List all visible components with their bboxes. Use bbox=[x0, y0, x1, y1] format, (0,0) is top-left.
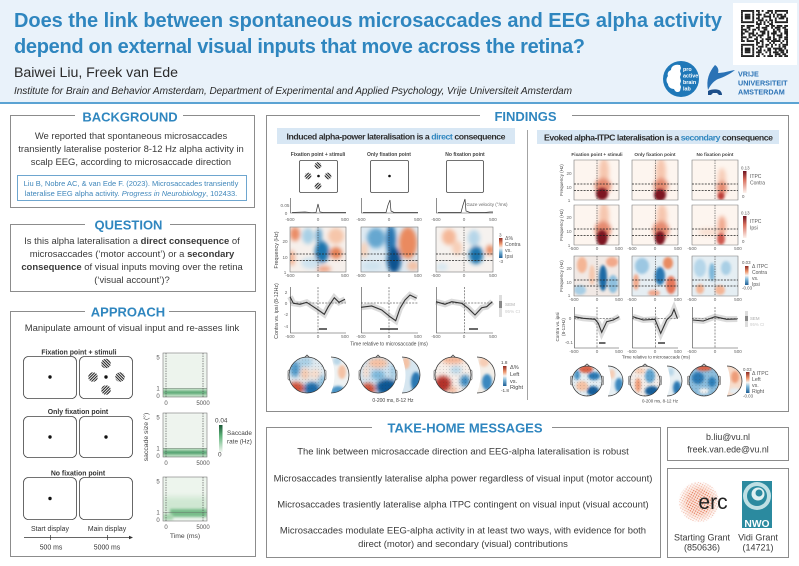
gaze velocity plots bbox=[281, 198, 508, 222]
task: no fixation point: No fixation point bbox=[51, 470, 106, 478]
ITPC lateralisation time-course: SEM bbox=[750, 316, 760, 321]
subheading: evoked alpha ITPC: Evoked alpha-ITPC lateralisation is a secondary consequence bbox=[544, 132, 773, 142]
ITPC contra heatmaps: 10 bbox=[566, 185, 572, 190]
grant labels: Vidi Grant bbox=[738, 532, 778, 542]
saccade heatmap: no fixation: 0 bbox=[164, 525, 168, 531]
question text: microsaccades (‘motor account’) or a secondary bbox=[30, 249, 235, 260]
saccade heatmap: no fixation bbox=[156, 477, 210, 531]
power colour bar: vs. bbox=[505, 248, 512, 254]
ITPC colour bars: -0.03 bbox=[742, 286, 753, 290]
lateralisation time-course: left: 0 bbox=[463, 334, 466, 339]
ITPC lateralisation time-course: 0 bbox=[654, 349, 657, 354]
ITPC topography: no fixation bbox=[688, 364, 743, 396]
ITPC topography: fixation + stimuli bbox=[570, 364, 624, 396]
saccade heatmap: no fixation: 5000 bbox=[196, 525, 210, 531]
lateralisation time-course: left: 0 bbox=[317, 334, 320, 339]
panel: contact: freek.van.ede@vu.nl bbox=[687, 444, 769, 454]
ITPC topography colour bar bbox=[743, 367, 769, 398]
ITPC lateralisation time-course: 500 bbox=[674, 349, 682, 354]
power heatmap: fixation + stimuli bbox=[282, 227, 346, 275]
saccade heatmap: fixation + stimuli: 5 bbox=[156, 356, 160, 362]
ITPC topography colour bar: vs. bbox=[752, 383, 759, 389]
ITPC colour bars: 0.13 bbox=[741, 210, 750, 216]
heading: take-home messages: TAKE-HOME MESSAGES bbox=[387, 420, 543, 436]
condition labels right: Fixation point + stimuli bbox=[571, 152, 623, 157]
message 3: Microsaccades trasiently lateralise alpha ITPC contingent on visual input (visual account) bbox=[277, 500, 649, 510]
question text: Is this alpha lateralisation a direct consequence of bbox=[24, 236, 240, 247]
topographies: left: 0-200 ms, 8-12 Hz bbox=[372, 398, 414, 404]
logo: VU text: AMSTERDAM bbox=[738, 88, 785, 96]
ITPC lateralisation time-course: (8-12Hz) bbox=[561, 318, 566, 336]
power x tick labels and axis: 0 bbox=[388, 273, 391, 278]
logo: VU text: UNIVERSITEIT bbox=[738, 78, 788, 88]
message 1: The link between microsaccade direction and EEG-alpha lateralisation is robust bbox=[297, 446, 629, 458]
timeline bbox=[24, 526, 133, 552]
ITPC difference heatmaps: 1 bbox=[568, 293, 571, 298]
ITPC ipsi heatmaps bbox=[559, 164, 742, 251]
power colour bar: Δ% bbox=[505, 236, 513, 242]
ITPC colour bars: ITPC bbox=[750, 219, 762, 225]
lateralisation time-course: left: 0 bbox=[388, 334, 391, 339]
ITPC difference heatmaps: 500 bbox=[734, 297, 742, 302]
topography colour bar left: 1.8 bbox=[501, 360, 508, 365]
power x tick labels and axis: -500 bbox=[285, 273, 295, 278]
ITPC ipsi heatmaps: -500 bbox=[627, 246, 637, 251]
lateralisation time-course: left: 0 bbox=[285, 301, 288, 306]
task: no fixation point bbox=[24, 470, 132, 520]
ITPC ipsi heatmaps: 500 bbox=[615, 246, 623, 251]
background text: We reported that spontaneous microsaccades bbox=[35, 131, 227, 142]
ITPC colour bars: Ipsi bbox=[752, 282, 760, 288]
citation: Liu B, Nobre AC, & van Ede F. (2023). Microsaccades transiently bbox=[24, 179, 239, 188]
saccade heatmap: only fixation: 5000 bbox=[196, 461, 210, 467]
ITPC contra heatmaps: 1 bbox=[568, 198, 571, 203]
power x tick labels and axis: -500 bbox=[356, 273, 366, 278]
ITPC difference heatmaps: Frequency (Hz) bbox=[559, 260, 564, 292]
heading: findings: FINDINGS bbox=[494, 109, 557, 124]
message 2: Microsaccades transiently lateralise alpha power regardless of visual input (motor account) bbox=[274, 474, 652, 484]
task: fixation point + stimuli: Fixation point + stimuli bbox=[41, 350, 117, 356]
ITPC ipsi heatmaps: 1 bbox=[568, 243, 571, 248]
ITPC colour bars: vs. bbox=[752, 276, 758, 282]
ITPC lateralisation time-course bbox=[555, 307, 764, 360]
logo: ERC: erc bbox=[698, 491, 728, 514]
ITPC ipsi heatmaps: Frequency (Hz) bbox=[559, 164, 564, 196]
title: Does the link between spontaneous microsaccades and EEG alpha activity bbox=[14, 10, 723, 32]
power heatmap: fixation + stimuli: 10 bbox=[282, 255, 288, 260]
power x tick labels and axis: 500 bbox=[341, 273, 349, 278]
ITPC lateralisation time-course: -500 bbox=[687, 349, 697, 354]
saccade axis labels bbox=[142, 413, 200, 540]
lateralisation time-course: left: -500 bbox=[356, 334, 366, 339]
power colour bar: -3 bbox=[499, 259, 504, 264]
power x tick labels and axis: Frequency (Hz) bbox=[274, 231, 280, 269]
stimulus screens left bbox=[300, 160, 484, 192]
lateralisation time-course: left: 500 bbox=[341, 334, 349, 339]
gaze velocity plots: -500 bbox=[285, 217, 295, 222]
saccade heatmap: only fixation: 1 bbox=[156, 446, 160, 452]
lateralisation time-course: left bbox=[274, 283, 520, 348]
ITPC ipsi heatmaps: 500 bbox=[734, 246, 742, 251]
heading: approach: APPROACH bbox=[91, 304, 165, 320]
condition labels left: Only fixation point bbox=[367, 152, 411, 158]
ITPC difference heatmaps: -500 bbox=[627, 297, 637, 302]
topography colour bar left: Left bbox=[510, 372, 520, 378]
power x tick labels and axis: 0 bbox=[317, 273, 320, 278]
power x tick labels and axis bbox=[274, 231, 497, 278]
ITPC ipsi heatmaps: 10 bbox=[566, 229, 572, 234]
gaze velocity plots: 500 bbox=[489, 217, 497, 222]
timeline: Start display bbox=[31, 526, 70, 533]
gaze velocity plots: 500 bbox=[341, 217, 349, 222]
ITPC colour bars: Contra bbox=[752, 270, 767, 276]
citation: lateralise EEG alpha activity. Progress in Neurobiology, 102433. bbox=[25, 189, 237, 198]
logo: proactive brain lab: lab bbox=[683, 86, 691, 92]
panel: contact: b.liu@vu.nl bbox=[706, 432, 750, 442]
gaze velocity plots: 0 bbox=[463, 217, 466, 222]
ITPC ipsi heatmaps: 0 bbox=[714, 246, 717, 251]
lateralisation time-course: left: -2 bbox=[284, 312, 288, 317]
background text: transiently lateralise posterior 8-12 Hz alpha activity in bbox=[18, 144, 244, 155]
saccade axis labels: Time (ms) bbox=[170, 533, 200, 540]
saccade colour bar: Saccade bbox=[227, 430, 252, 437]
saccade colour bar: 0 bbox=[218, 452, 222, 458]
gaze velocity plots: 500 bbox=[414, 217, 422, 222]
lateralisation time-course: left: -500 bbox=[431, 334, 441, 339]
topography colour bar left: Right bbox=[510, 385, 524, 391]
gaze velocity plots: 0.05 bbox=[281, 203, 290, 208]
panel: findings bbox=[266, 108, 788, 412]
saccade heatmap: fixation + stimuli: 0 bbox=[164, 401, 168, 407]
affiliation: Institute for Brain and Behavior Amsterdam, Department of Experimental and Applied Psychology, Vrije Universiteit Amsterdam bbox=[14, 86, 572, 97]
ITPC ipsi heatmaps: 0 bbox=[654, 246, 657, 251]
timeline: 500 ms bbox=[40, 544, 63, 552]
ITPC topography colour bar: Δ ITPC bbox=[752, 371, 769, 377]
ITPC colour bars: Δ ITPC bbox=[752, 264, 768, 270]
message 4: Microsaccades modulate EEG-alpha activity in at least two ways, with evidence for both bbox=[280, 526, 646, 536]
ITPC colour bars: 0 bbox=[742, 239, 745, 244]
panel: question bbox=[10, 218, 256, 292]
ITPC ipsi heatmaps: 500 bbox=[674, 246, 682, 251]
timeline: Main display bbox=[88, 526, 127, 533]
ITPC difference heatmaps: -500 bbox=[569, 297, 579, 302]
saccade heatmap: only fixation: 5 bbox=[156, 416, 160, 422]
topography: only fixation bbox=[359, 355, 421, 395]
message 4: direct (motor) and secondary (visual) contributions bbox=[358, 539, 568, 550]
ITPC topography colour bar: 0.03 bbox=[743, 367, 752, 372]
saccade colour bar bbox=[215, 418, 252, 458]
saccade heatmap: only fixation bbox=[156, 413, 210, 467]
task: only fixation point: Only fixation point bbox=[48, 409, 109, 416]
question text bbox=[21, 236, 243, 286]
citation bbox=[18, 176, 246, 200]
lateralisation time-course: left: -4 bbox=[284, 324, 288, 329]
saccade heatmap: fixation + stimuli bbox=[156, 353, 210, 407]
saccade axis labels: saccade size (°) bbox=[142, 413, 150, 461]
ITPC ipsi heatmaps: Frequency (Hz) bbox=[559, 209, 564, 241]
lateralisation time-course: left: 500 bbox=[489, 334, 497, 339]
header band bbox=[0, 0, 799, 104]
logo: griffin bbox=[707, 65, 735, 95]
saccade heatmap: fixation + stimuli: 1 bbox=[156, 386, 160, 392]
power colour bar: 3 bbox=[499, 232, 502, 238]
power heatmap: only fixation bbox=[360, 225, 419, 273]
saccade heatmap: only fixation: 0 bbox=[156, 454, 160, 460]
topography: fixation + stimuli bbox=[288, 355, 349, 396]
power x tick labels and axis: 500 bbox=[489, 273, 497, 278]
condition labels right: No fixation point bbox=[697, 152, 734, 157]
timeline: 5000 ms bbox=[94, 544, 121, 552]
gaze velocity plots: Gaze velocity (°/ms) bbox=[466, 202, 508, 207]
panel: funding bbox=[668, 468, 788, 558]
ITPC difference heatmaps: -500 bbox=[687, 297, 697, 302]
subheading: induced alpha power bbox=[277, 128, 515, 144]
gaze velocity plots: -500 bbox=[356, 217, 366, 222]
ITPC contra heatmaps: 20 bbox=[566, 171, 572, 176]
ITPC lateralisation time-course: 500 bbox=[615, 349, 623, 354]
saccade colour bar: 0.04 bbox=[215, 418, 228, 424]
topography: no fixation bbox=[434, 355, 495, 394]
condition labels left: Fixation point + stimuli bbox=[291, 152, 346, 158]
topographies: left bbox=[288, 355, 495, 404]
panel: approach bbox=[10, 304, 256, 556]
ITPC difference heatmaps: 20 bbox=[566, 266, 572, 271]
ITPC topography colour bar: -0.03 bbox=[743, 394, 754, 398]
QR code bbox=[733, 3, 797, 65]
lateralisation time-course: left: Contra vs. ipsi (8-12Hz) bbox=[274, 283, 280, 339]
ITPC contra heatmaps bbox=[566, 158, 738, 203]
logo: proactive brain lab bbox=[663, 61, 699, 97]
topography colour bar left: -1.8 bbox=[501, 388, 509, 393]
ITPC ipsi heatmaps: -500 bbox=[569, 246, 579, 251]
saccade colour bar: rate (Hz) bbox=[227, 438, 252, 446]
ITPC colour bars bbox=[741, 166, 768, 290]
logo: proactive brain lab: active bbox=[683, 74, 698, 80]
title bbox=[14, 10, 723, 58]
saccade heatmap: fixation + stimuli: 0 bbox=[156, 394, 160, 400]
logo: VU text: VRIJE bbox=[738, 70, 759, 78]
task: fixation point + stimuli bbox=[24, 350, 132, 398]
ITPC difference heatmaps bbox=[559, 256, 742, 302]
condition labels left: No fixation point bbox=[445, 152, 485, 158]
topographies: right: 0-200 ms, 8-12 Hz bbox=[642, 398, 678, 404]
heading: question: QUESTION bbox=[95, 218, 162, 232]
saccade heatmap: no fixation: 5 bbox=[156, 480, 160, 486]
lateralisation time-course: left: 2 bbox=[285, 290, 288, 295]
ITPC difference heatmaps: 0 bbox=[654, 297, 657, 302]
subheading: evoked alpha ITPC bbox=[537, 130, 779, 144]
ITPC ipsi heatmaps: 0 bbox=[596, 246, 599, 251]
ITPC topography: only fixation bbox=[628, 364, 683, 396]
background text bbox=[18, 131, 244, 168]
power x tick labels and axis: 0 bbox=[463, 273, 466, 278]
power colour bar bbox=[499, 232, 521, 264]
power heatmap: fixation + stimuli: 20 bbox=[282, 239, 288, 244]
power colour bar: Ipsi bbox=[505, 254, 513, 260]
power x tick labels and axis: 500 bbox=[414, 273, 422, 278]
ITPC ipsi heatmaps: -500 bbox=[687, 246, 697, 251]
logo: proactive brain lab: brain bbox=[683, 80, 696, 86]
ITPC lateralisation time-course: 95% CI bbox=[750, 322, 764, 327]
authors: Baiwei Liu, Freek van Ede bbox=[14, 65, 178, 81]
ITPC difference heatmaps: 500 bbox=[674, 297, 682, 302]
lateralisation time-course: left: 95% CI bbox=[505, 309, 520, 314]
saccade heatmap: only fixation: 0 bbox=[164, 461, 168, 467]
lateralisation time-course: left: 500 bbox=[414, 334, 422, 339]
gaze velocity plots: -500 bbox=[431, 217, 441, 222]
panel: contact bbox=[668, 428, 788, 460]
ITPC topography colour bar: Left bbox=[752, 377, 761, 383]
grant labels: (850636) bbox=[684, 542, 720, 552]
ITPC lateralisation time-course: -500 bbox=[569, 349, 579, 354]
ITPC lateralisation time-course: Time relative to microsaccade (ms) bbox=[622, 354, 691, 360]
background text: scalp EEG, according to microsaccade direction bbox=[31, 157, 231, 168]
logo: NWO: NWO bbox=[744, 519, 770, 530]
ITPC colour bars: ITPC bbox=[750, 174, 762, 180]
heading: background: BACKGROUND bbox=[82, 110, 178, 124]
ITPC lateralisation time-course: 0 bbox=[714, 349, 717, 354]
ITPC lateralisation time-course: Contra vs. ipsi bbox=[555, 312, 560, 342]
saccade heatmap: fixation + stimuli: 5000 bbox=[196, 401, 210, 407]
message 4 bbox=[280, 526, 646, 550]
ITPC lateralisation time-course: 0 bbox=[569, 316, 572, 321]
question text: (‘visual account’)? bbox=[94, 275, 170, 286]
ITPC difference heatmaps: 10 bbox=[566, 280, 572, 285]
ITPC colour bars: 0.13 bbox=[741, 166, 750, 170]
approach subtitle: Manipulate amount of visual input and re-asses link bbox=[25, 323, 240, 334]
condition labels right: Only fixation point bbox=[634, 152, 676, 157]
condition labels right bbox=[571, 152, 734, 157]
lateralisation time-course: left: -500 bbox=[285, 334, 295, 339]
ITPC topography colour bar: Right bbox=[752, 389, 765, 395]
ITPC lateralisation time-course: -500 bbox=[627, 349, 637, 354]
grant labels: Starting Grant bbox=[674, 532, 731, 542]
topography colour bar left bbox=[501, 360, 524, 393]
topographies: right bbox=[570, 364, 743, 404]
ITPC difference heatmaps: 500 bbox=[615, 297, 623, 302]
title: depend on external visual inputs that move across the retina? bbox=[14, 36, 585, 58]
power colour bar: Contra bbox=[505, 242, 521, 248]
gaze velocity plots: 0 bbox=[317, 217, 320, 222]
topography colour bar left: Δ% bbox=[510, 365, 519, 371]
ITPC colour bars: Contra bbox=[750, 180, 765, 186]
ITPC ipsi heatmaps: 20 bbox=[566, 215, 572, 220]
ITPC colour bars: 0.03 bbox=[742, 260, 751, 265]
ITPC lateralisation time-course: -0.1 bbox=[565, 340, 573, 345]
ITPC colour bars: Ipsi bbox=[750, 226, 758, 232]
logo: proactive brain lab: pro bbox=[683, 67, 692, 73]
ITPC lateralisation time-course: 500 bbox=[734, 349, 742, 354]
ITPC difference heatmaps: 0 bbox=[596, 297, 599, 302]
subheading: induced alpha power: Induced alpha-power lateralisation is a direct consequence bbox=[286, 132, 506, 142]
saccade heatmap: no fixation: 0 bbox=[156, 518, 160, 524]
power x tick labels and axis: -500 bbox=[431, 273, 441, 278]
ITPC difference heatmaps: 0 bbox=[714, 297, 717, 302]
question text: consequence of visual inputs moving over the retina bbox=[21, 262, 243, 273]
gaze velocity plots: 0 bbox=[285, 211, 288, 216]
ITPC lateralisation time-course: 0 bbox=[596, 349, 599, 354]
condition labels left bbox=[291, 152, 485, 158]
panel: background bbox=[10, 110, 254, 208]
logo: VU text bbox=[738, 70, 788, 96]
grant labels bbox=[674, 532, 778, 552]
lateralisation time-course: left: Time relative to microsaccade (ms) bbox=[350, 342, 428, 348]
grant labels: (14721) bbox=[742, 542, 774, 552]
task: only fixation point bbox=[24, 409, 132, 458]
saccade heatmap: no fixation: 1 bbox=[156, 510, 160, 516]
panel: take-home messages bbox=[266, 420, 660, 558]
lateralisation time-course: left: SEM bbox=[505, 302, 515, 307]
topography colour bar left: vs. bbox=[510, 379, 518, 385]
gaze velocity plots: 0 bbox=[388, 217, 391, 222]
power heatmap: no fixation bbox=[436, 227, 494, 272]
ITPC colour bars: 0 bbox=[742, 194, 745, 199]
power heatmap: fixation + stimuli: 1 bbox=[284, 270, 287, 275]
